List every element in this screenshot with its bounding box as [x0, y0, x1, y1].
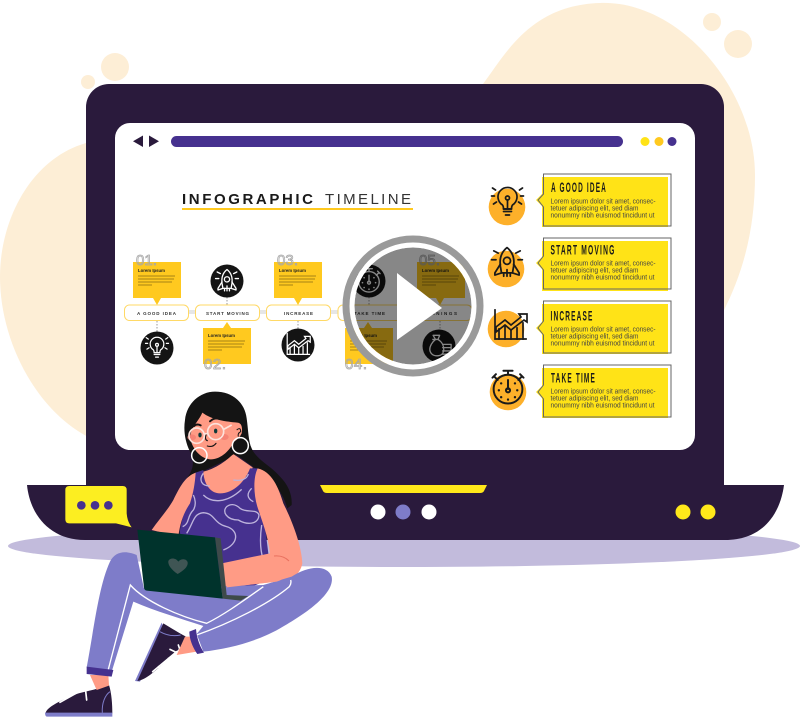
under-chin hair shadow	[193, 447, 234, 469]
hand over keyboard	[225, 553, 291, 587]
card: take time: nonummy nibh euismod tincidunt ut	[550, 402, 655, 409]
card: increase: tetuer adipiscing elit, sed diam	[550, 333, 639, 340]
side dots	[676, 504, 716, 520]
laptop base	[27, 485, 784, 540]
base notch	[320, 485, 487, 493]
yellow note 5: Lorem Ipsum	[422, 268, 449, 273]
card: increase	[488, 301, 671, 354]
face details	[187, 418, 241, 446]
step numbers	[136, 252, 440, 373]
title: INFOGRAPHIC	[182, 191, 313, 208]
decorative circles	[81, 13, 752, 89]
yellow note 5	[417, 262, 465, 305]
card: start moving: START MOVING	[550, 242, 616, 258]
timeline	[124, 252, 472, 373]
video play button	[346, 239, 480, 373]
top pattern	[183, 473, 263, 560]
yellow note 3: Lorem Ipsum	[279, 268, 306, 273]
orange icon disc	[488, 311, 524, 347]
browser bar	[133, 136, 676, 147]
yellow note 3	[274, 262, 322, 305]
orange icon disc	[490, 374, 526, 410]
yellow note 1: Lorem Ipsum	[138, 268, 165, 273]
far arm	[152, 473, 196, 537]
card: start moving: Lorem ipsum dolor sit amet, consec-	[550, 260, 656, 267]
person with laptop	[45, 392, 332, 717]
side cards	[488, 174, 671, 418]
background blob: left	[0, 142, 90, 438]
heart logo	[168, 558, 188, 574]
left shoe	[45, 675, 112, 717]
laptop	[27, 84, 784, 540]
black icon circles	[140, 264, 456, 364]
near arm	[222, 468, 302, 587]
card: a good idea: Lorem ipsum dolor sit amet, consec-	[550, 198, 656, 205]
card: a good idea: A GOOD IDEA	[551, 179, 607, 195]
pants	[87, 552, 332, 677]
base dots	[370, 504, 436, 520]
title	[182, 191, 413, 210]
yellow note 2: Lorem Ipsum	[208, 333, 235, 338]
pill labels	[137, 311, 457, 316]
card: increase: INCREASE	[550, 308, 594, 324]
connectors	[188, 310, 409, 314]
small laptop	[137, 530, 248, 601]
white timeline icons	[145, 269, 451, 357]
pill labels: EARNINGS	[422, 311, 457, 316]
card: take time: TAKE TIME	[551, 370, 596, 386]
step numbers: 05.	[419, 252, 440, 269]
card: a good idea: tetuer adipiscing elit, sed diam	[550, 205, 639, 212]
card: increase: nonummy nibh euismod tincidunt ut	[550, 340, 655, 347]
yellow note 2	[203, 322, 251, 364]
chat bubble	[65, 486, 132, 527]
card: start moving	[488, 238, 671, 291]
card: start moving: nonummy nibh euismod tincidunt ut	[550, 274, 655, 281]
step numbers: 04.	[345, 356, 367, 373]
screen	[115, 123, 695, 450]
pill labels: START MOVING	[206, 311, 249, 316]
card: increase: Lorem ipsum dolor sit amet, consec-	[550, 326, 656, 333]
card: take time: tetuer adipiscing elit, sed diam	[550, 395, 639, 402]
title: TIMELINE	[325, 191, 411, 208]
laptop lid	[86, 84, 724, 524]
step numbers: 02.	[204, 356, 226, 373]
card: a good idea: nonummy nibh euismod tincidunt ut	[550, 212, 655, 219]
card: a good idea	[489, 174, 671, 227]
background blob: right	[483, 3, 755, 314]
pill labels: TAKE TIME	[354, 311, 385, 316]
ground shadow	[8, 525, 800, 567]
right shoe	[135, 623, 197, 682]
dotted leads	[157, 297, 440, 332]
chest	[198, 454, 253, 498]
step pills	[124, 305, 472, 320]
card: take time	[490, 365, 671, 418]
step numbers: 03.	[277, 252, 298, 269]
card: start moving: tetuer adipiscing elit, sed diam	[550, 267, 639, 274]
yellow note 1	[133, 262, 181, 305]
yellow note 4	[345, 322, 393, 364]
orange icon disc	[488, 251, 524, 287]
yellow note 4: Lorem Ipsum	[350, 333, 377, 338]
glasses	[189, 424, 232, 443]
pill labels: INCREASE	[284, 311, 313, 316]
hair	[184, 392, 292, 508]
earrings	[192, 438, 248, 463]
face	[190, 413, 242, 459]
card: take time: Lorem ipsum dolor sit amet, consec-	[550, 388, 656, 395]
pill labels: A GOOD IDEA	[137, 311, 177, 316]
orange icon disc	[489, 189, 525, 225]
torso	[180, 468, 268, 593]
step numbers: 01.	[136, 252, 157, 269]
